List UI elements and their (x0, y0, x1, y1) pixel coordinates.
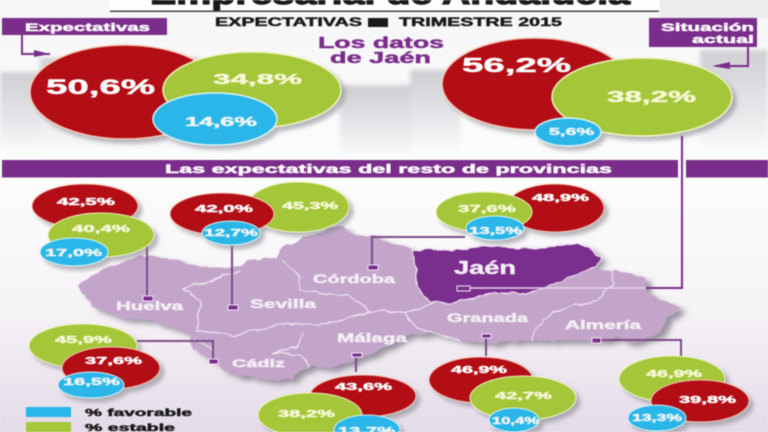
map: Jaén province (414, 243, 601, 303)
heading: los datos de Jaén: Los datos (318, 35, 444, 52)
bubbles: Cádiz (29, 324, 160, 398)
label: expectativas with arrow: Expectativas (25, 22, 150, 34)
label: situación actual with arrow (649, 18, 757, 69)
bubbles: Almería: 13,3% (632, 413, 682, 424)
bubbles: situación actual Jaén: 38,2% (607, 89, 696, 106)
bubbles: Sevilla: 45,3% (282, 201, 338, 212)
label: situación actual with arrow: actual (692, 34, 754, 46)
map labels: Granada (447, 311, 529, 325)
bubbles: Sevilla (170, 182, 349, 245)
section bar: las expectativas del resto de provincias: Las expectativas del resto de provincias (165, 162, 613, 176)
title (110, 0, 659, 12)
map labels: Cádiz (232, 358, 286, 370)
label: expectativas with arrow (2, 18, 167, 57)
legend: % favorable (85, 408, 193, 419)
connector: Jaén situation line (470, 136, 682, 288)
section bar: las expectativas del resto de provincias (2, 160, 768, 178)
bubbles: Huelva: 17,0% (45, 248, 102, 259)
subtitle: expectativas trimestre 2015: TRIMESTRE 2015 (399, 15, 563, 29)
subtitle: expectativas trimestre 2015 (215, 15, 563, 29)
bubbles: Cádiz: 37,6% (85, 356, 142, 367)
heading: los datos de Jaén: de Jaén (330, 50, 431, 67)
bubbles: Huelva (32, 184, 154, 266)
bubbles: Sevilla: 12,7% (204, 228, 258, 239)
connector lines to provinces (137, 237, 681, 372)
subtitle: expectativas trimestre 2015: EXPECTATIVAS (215, 15, 362, 29)
map labels: Huelva (116, 299, 184, 313)
bubbles: situación actual Jaén: 56,2% (462, 55, 571, 77)
bubbles: expectativas Andalucía: 34,8% (213, 71, 302, 88)
bubbles: situación actual Jaén (442, 38, 732, 146)
map labels: Jaén (454, 258, 516, 278)
bubbles: Córdoba (436, 184, 604, 240)
bubbles: Córdoba: 13,5% (469, 226, 522, 237)
bubbles: Málaga (258, 375, 416, 432)
bubbles: Almería (619, 356, 749, 431)
bubbles: Almería: 46,9% (646, 369, 702, 380)
map labels: Almería (565, 318, 642, 332)
bubbles: Málaga: 38,2% (278, 409, 335, 420)
heading: los datos de Jaén (318, 35, 444, 67)
bubbles: Almería: 39,8% (679, 395, 736, 406)
bubbles: Huelva: 40,4% (72, 224, 130, 235)
bubbles: Huelva: 42,5% (57, 197, 115, 208)
map: Andalucía provinces (78, 226, 681, 380)
bubbles: Málaga: 43,6% (335, 382, 392, 393)
map labels: Córdoba (313, 272, 396, 286)
bubbles: Granada: 46,9% (451, 365, 507, 376)
bubbles: Córdoba: 37,6% (458, 204, 516, 215)
bubbles: Granada: 42,7% (495, 391, 552, 402)
legend (26, 407, 193, 432)
map: province borders (183, 261, 614, 366)
bubbles: expectativas Andalucía (30, 45, 341, 145)
bubbles: expectativas Andalucía: 50,6% (46, 76, 156, 99)
bubbles: Granada: 10,4% (492, 416, 539, 427)
bubbles: Sevilla: 42,0% (195, 204, 253, 215)
bubbles: Cádiz: 45,9% (55, 335, 112, 346)
markers on map (143, 265, 601, 364)
bubbles: Cádiz: 16,5% (63, 377, 120, 388)
label: situación actual with arrow: Situación (661, 22, 755, 34)
bubbles: Córdoba: 48,9% (532, 193, 589, 204)
map labels: Sevilla (250, 297, 317, 311)
map labels (116, 258, 642, 370)
bubbles: Granada (429, 357, 576, 432)
bubbles: expectativas Andalucía: 14,6% (185, 114, 258, 129)
bubbles: situación actual Jaén: 5,6% (549, 127, 594, 138)
map labels: Málaga (337, 331, 408, 345)
